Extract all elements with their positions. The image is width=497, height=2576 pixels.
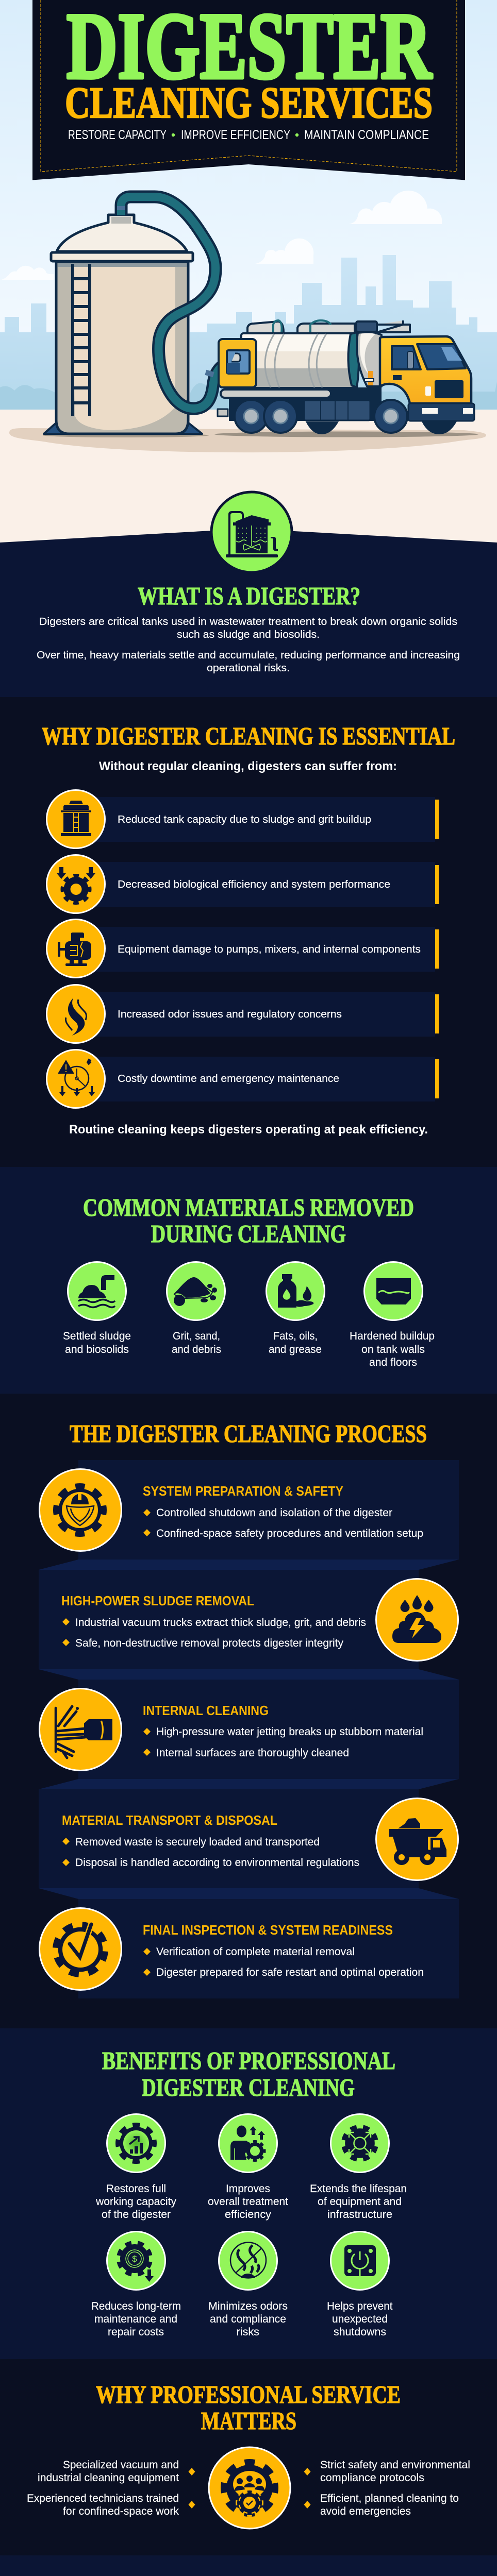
- section: cleaning process: [0, 1394, 497, 2028]
- benefit: extends lifespan: infrastructure: [327, 2208, 392, 2221]
- benefit: reduces costs: [91, 2232, 181, 2338]
- step 4: MATERIAL TRANSPORT & DISPOSAL: [62, 1812, 277, 1828]
- heading: BENEFITS OF PROFESSIONAL: [102, 2047, 395, 2075]
- row 4: Increased odor issues and regulatory concerns: [118, 1008, 342, 1020]
- benefit: extends lifespan: of equipment and: [318, 2195, 402, 2208]
- tagline: RESTORE CAPACITY: [68, 128, 167, 142]
- tank end cap: [348, 332, 359, 387]
- left points: [27, 2459, 195, 2517]
- step 1: [39, 1460, 459, 1560]
- item: settled sludge: and biosolids: [65, 1343, 129, 1355]
- cab: [380, 336, 471, 403]
- item: hardened buildup: and floors: [369, 1356, 417, 1368]
- step 5: FINAL INSPECTION & SYSTEM READINESS: [143, 1922, 393, 1938]
- section: ideal for: [0, 2555, 497, 2576]
- row 5: [46, 1050, 439, 1108]
- item: hardened buildup: [350, 1262, 435, 1368]
- benefit: minimizes odors: [208, 2232, 288, 2338]
- row 5: Costly downtime and emergency maintenance: [118, 1073, 339, 1084]
- row 3: Equipment damage to pumps, mixers, and internal components: [118, 943, 421, 955]
- section: common materials removed: [0, 1167, 497, 1394]
- benefit: reduces costs: Reduces long-term: [91, 2300, 181, 2312]
- row 4: [46, 985, 439, 1043]
- step 4: Disposal is handled according to environmental regulations: [75, 1856, 359, 1869]
- right points: [304, 2459, 470, 2517]
- row 2: [46, 855, 439, 913]
- step 5: [39, 1899, 459, 1998]
- step 3: High-pressure water jetting breaks up stubborn material: [156, 1725, 423, 1738]
- item: fats oils grease: and grease: [269, 1343, 322, 1355]
- item: grit and sand: and debris: [172, 1343, 221, 1355]
- top pipes: [247, 320, 410, 333]
- item: fats oils grease: [266, 1262, 325, 1355]
- right points: Strict safety and environmental: [320, 2459, 470, 2471]
- benefit: restores capacity: of the digester: [102, 2208, 171, 2221]
- step 2: HIGH-POWER SLUDGE REMOVAL: [61, 1593, 254, 1608]
- benefit: improves efficiency: [208, 2114, 288, 2221]
- benefit: restores capacity: Restores full: [106, 2182, 166, 2195]
- text block: operational risks.: [207, 662, 290, 674]
- icon: team gear: [209, 2447, 290, 2529]
- step 1: Controlled shutdown and isolation of the digester: [156, 1506, 392, 1519]
- item: hardened buildup: Hardened buildup: [350, 1330, 435, 1342]
- benefit: improves efficiency: overall treatment: [208, 2195, 288, 2208]
- item: grit and sand: Grit, sand,: [173, 1330, 220, 1342]
- illustration: hose: [121, 197, 235, 409]
- section: why digester cleaning is essential: [0, 697, 497, 1167]
- step 3: Internal surfaces are thoroughly cleaned: [156, 1747, 349, 1759]
- ladder: [73, 264, 90, 416]
- benefit: extends lifespan: [310, 2114, 407, 2221]
- step 2: Industrial vacuum trucks extract thick sludge, grit, and debris: [75, 1616, 366, 1629]
- benefit: reduces costs: repair costs: [108, 2326, 164, 2338]
- ground shadow: [9, 428, 486, 452]
- benefit: restores capacity: [95, 2114, 176, 2221]
- hills: [0, 382, 497, 410]
- benefit: prevents shutdowns: [327, 2232, 393, 2338]
- benefit: minimizes odors: and compliance: [210, 2313, 286, 2325]
- row 2: Decreased biological efficiency and system performance: [118, 878, 390, 890]
- title banner: [32, 0, 465, 180]
- item: grit and sand: [167, 1262, 225, 1355]
- item: settled sludge: Settled sludge: [63, 1330, 131, 1342]
- wheels: [235, 400, 457, 434]
- closing statement: Routine cleaning keeps digesters operating at peak efficiency.: [69, 1123, 428, 1137]
- section: benefits: [0, 2028, 497, 2359]
- right points: avoid emergencies: [320, 2505, 411, 2517]
- benefit: restores capacity: working capacity: [95, 2195, 176, 2208]
- right points: compliance protocols: [320, 2471, 424, 2484]
- tank: [241, 333, 355, 388]
- row 1: Reduced tank capacity due to sludge and grit buildup: [118, 814, 371, 825]
- intro text: Without regular cleaning, digesters can suffer from:: [99, 759, 397, 773]
- bumper: [408, 403, 474, 421]
- step 2: Safe, non-destructive removal protects digester integrity: [75, 1637, 343, 1649]
- text block: such as sludge and biosolids.: [177, 629, 320, 640]
- heading: COMMON MATERIALS REMOVED: [83, 1194, 414, 1222]
- illustration: vacuum truck: [214, 320, 478, 437]
- zigzag ribbon folds: [39, 1560, 459, 1899]
- heading: MATTERS: [201, 2408, 296, 2435]
- benefit: prevents shutdowns: unexpected: [332, 2313, 388, 2325]
- heading: DIGESTER CLEANING: [142, 2074, 355, 2102]
- benefit: improves efficiency: Improves: [226, 2182, 270, 2195]
- benefit: minimizes odors: risks: [236, 2326, 259, 2338]
- benefit: reduces costs: maintenance and: [94, 2313, 177, 2325]
- text block: [37, 616, 460, 674]
- icon: digester tank: [211, 492, 292, 572]
- left points: Specialized vacuum and: [63, 2459, 179, 2471]
- step 5: Verification of complete material removal: [156, 1945, 355, 1958]
- heading: DURING CLEANING: [151, 1221, 346, 1248]
- step 3: INTERNAL CLEANING: [143, 1703, 269, 1718]
- step 2: [39, 1570, 458, 1669]
- skyline: [0, 255, 497, 410]
- left points: for confined-space work: [63, 2505, 179, 2517]
- benefit: reduces costs: $: [132, 2254, 137, 2264]
- row 3: [46, 919, 439, 978]
- hero background: [0, 0, 497, 549]
- row 1: [46, 790, 439, 848]
- tagline: IMPROVE EFFICIENCY: [181, 128, 290, 142]
- rear box: [219, 339, 256, 387]
- text block: Over time, heavy materials settle and accumulate, reducing performance and increasing: [37, 649, 460, 661]
- benefit: minimizes odors: Minimizes odors: [208, 2300, 288, 2312]
- heading: [102, 2047, 395, 2102]
- item: hardened buildup: on tank walls: [361, 1343, 425, 1355]
- step 3: [39, 1680, 459, 1779]
- item: settled sludge: [63, 1262, 131, 1355]
- step 4: Removed waste is securely loaded and transported: [75, 1836, 320, 1848]
- underframe: [229, 387, 382, 421]
- clouds: [2, 191, 442, 280]
- heading: WHY PROFESSIONAL SERVICE: [96, 2381, 401, 2409]
- item: fats oils grease: Fats, oils,: [273, 1330, 318, 1342]
- tagline: MAINTAIN COMPLIANCE: [304, 128, 429, 142]
- step 4: [39, 1789, 458, 1888]
- benefit: extends lifespan: Extends the lifespan: [310, 2182, 407, 2195]
- heading: [96, 2381, 401, 2435]
- left points: Experienced technicians trained: [27, 2492, 179, 2504]
- illustration: digester tank: [43, 215, 209, 437]
- step 1: Confined-space safety procedures and ventilation setup: [156, 1527, 423, 1539]
- section: what is a digester: [0, 492, 497, 697]
- left points: industrial cleaning equipment: [38, 2471, 179, 2484]
- benefit: prevents shutdowns: Helps prevent: [327, 2300, 393, 2312]
- tagline: [68, 128, 429, 142]
- text block: Digesters are critical tanks used in wastewater treatment to break down organic solids: [39, 616, 457, 628]
- benefit: prevents shutdowns: shutdowns: [334, 2326, 386, 2338]
- step 5: Digester prepared for safe restart and optimal operation: [156, 1966, 424, 1978]
- section: why professional service matters: [0, 2359, 497, 2555]
- step 1: SYSTEM PREPARATION & SAFETY: [143, 1483, 343, 1499]
- benefit: improves efficiency: efficiency: [225, 2208, 271, 2221]
- right points: Efficient, planned cleaning to: [320, 2492, 459, 2504]
- heading: [83, 1194, 414, 1248]
- heading: WHAT IS A DIGESTER?: [138, 583, 360, 610]
